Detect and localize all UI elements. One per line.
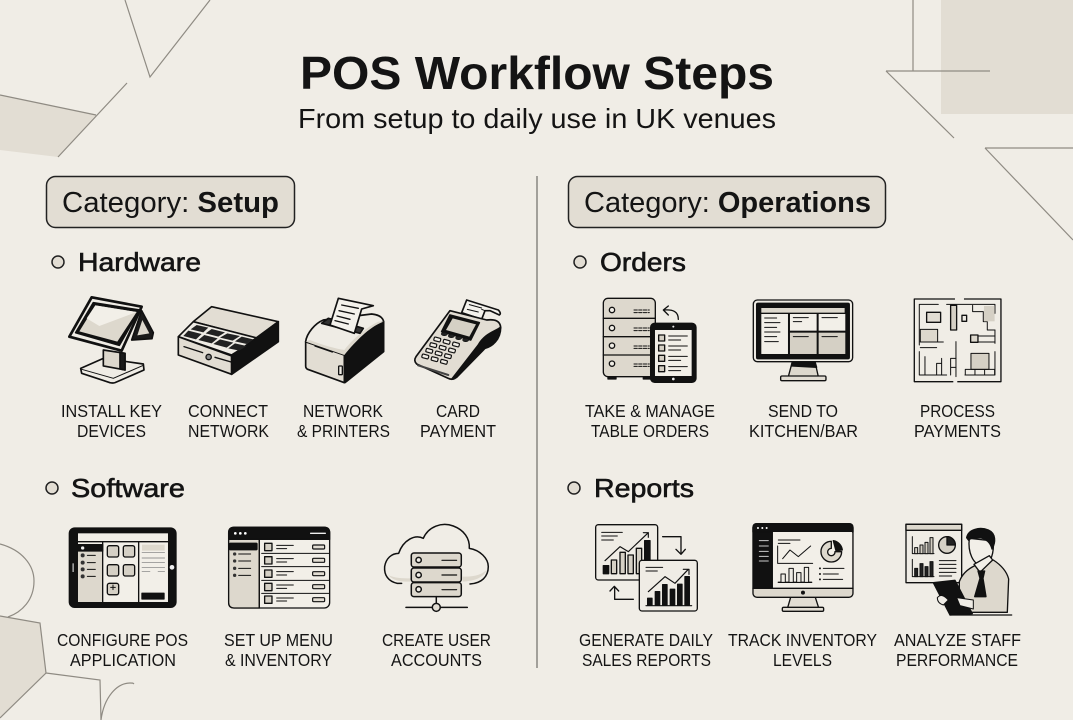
label: send to kitchen or bar: KITCHEN/BAR (749, 421, 858, 441)
heading: software: Software (71, 473, 185, 503)
icon: floor plan (914, 299, 1001, 382)
category badge: operations: Category: Operations (584, 187, 871, 219)
icon: cash drawer (178, 307, 278, 374)
label: process payments: PAYMENTS (914, 421, 1001, 441)
subtitle: From setup to daily use in UK venues (298, 103, 776, 134)
label: connect network (188, 401, 269, 441)
heading: orders: Orders (600, 247, 686, 277)
panel: operations (568, 176, 1021, 670)
label: create user accounts (382, 630, 491, 670)
label: configure POS application (57, 630, 188, 670)
label: set up menu and inventory (224, 630, 333, 670)
label: send to kitchen or bar: SEND TO (768, 401, 838, 421)
label: set up menu and inventory: & INVENTORY (225, 650, 332, 670)
category badge: setup (46, 176, 294, 228)
heading: hardware: Hardware (78, 247, 201, 277)
label: card payment: PAYMENT (420, 421, 496, 441)
category badge: operations (568, 176, 886, 228)
label: analyze staff performance: PERFORMANCE (896, 650, 1018, 670)
label: analyze staff performance (894, 630, 1021, 670)
label: card payment (420, 401, 496, 441)
label: create user accounts: CREATE USER (382, 630, 491, 650)
label: take and manage table orders: TAKE & MANAGE (585, 401, 715, 421)
label: generate daily sales reports: GENERATE DAILY (579, 630, 713, 650)
label: set up menu and inventory: SET UP MENU (224, 630, 333, 650)
icon: daily sales reports (596, 525, 697, 611)
label: connect network: CONNECT (188, 401, 268, 421)
icon: server and tablet orders (603, 298, 696, 382)
label: install key devices: INSTALL KEY (61, 401, 162, 421)
label: configure POS application: CONFIGURE POS (57, 630, 188, 650)
label: take and manage table orders (585, 401, 715, 441)
icon: card terminal (415, 300, 501, 379)
label: install key devices: DEVICES (77, 421, 146, 441)
title: POS Workflow Steps (300, 47, 774, 99)
category badge: setup: Category: Setup (62, 187, 279, 219)
label: process payments (914, 401, 1001, 441)
label: card payment: CARD (436, 401, 480, 421)
label: network and printers: NETWORK (303, 401, 383, 421)
label: process payments: PROCESS (920, 401, 995, 421)
icon: menu and inventory screen (229, 527, 330, 608)
icon: POS application tablet (69, 528, 176, 607)
icon: staff performance analyst (906, 524, 1012, 615)
label: track inventory levels: TRACK INVENTORY (728, 630, 877, 650)
label: network and printers: & PRINTERS (297, 421, 390, 441)
icon: kitchen display monitor (753, 300, 853, 381)
label: track inventory levels (728, 630, 877, 670)
label: take and manage table orders: TABLE ORDERS (591, 421, 709, 441)
label: network and printers (297, 401, 390, 441)
label: configure POS application: APPLICATION (70, 650, 176, 670)
label: connect network: NETWORK (188, 421, 269, 441)
icon: POS terminal (69, 297, 153, 383)
panel: setup (46, 176, 501, 670)
label: generate daily sales reports (579, 630, 713, 670)
label: analyze staff performance: ANALYZE STAFF (894, 630, 1021, 650)
heading: reports: Reports (594, 473, 694, 503)
icon: inventory dashboard monitor (753, 524, 853, 611)
label: track inventory levels: LEVELS (773, 650, 832, 670)
label: send to kitchen or bar (749, 401, 858, 441)
icon: cloud server (385, 524, 488, 611)
icon: receipt printer (306, 298, 384, 383)
label: generate daily sales reports: SALES REPORTS (582, 650, 711, 670)
label: install key devices (61, 401, 162, 441)
label: create user accounts: ACCOUNTS (391, 650, 482, 670)
